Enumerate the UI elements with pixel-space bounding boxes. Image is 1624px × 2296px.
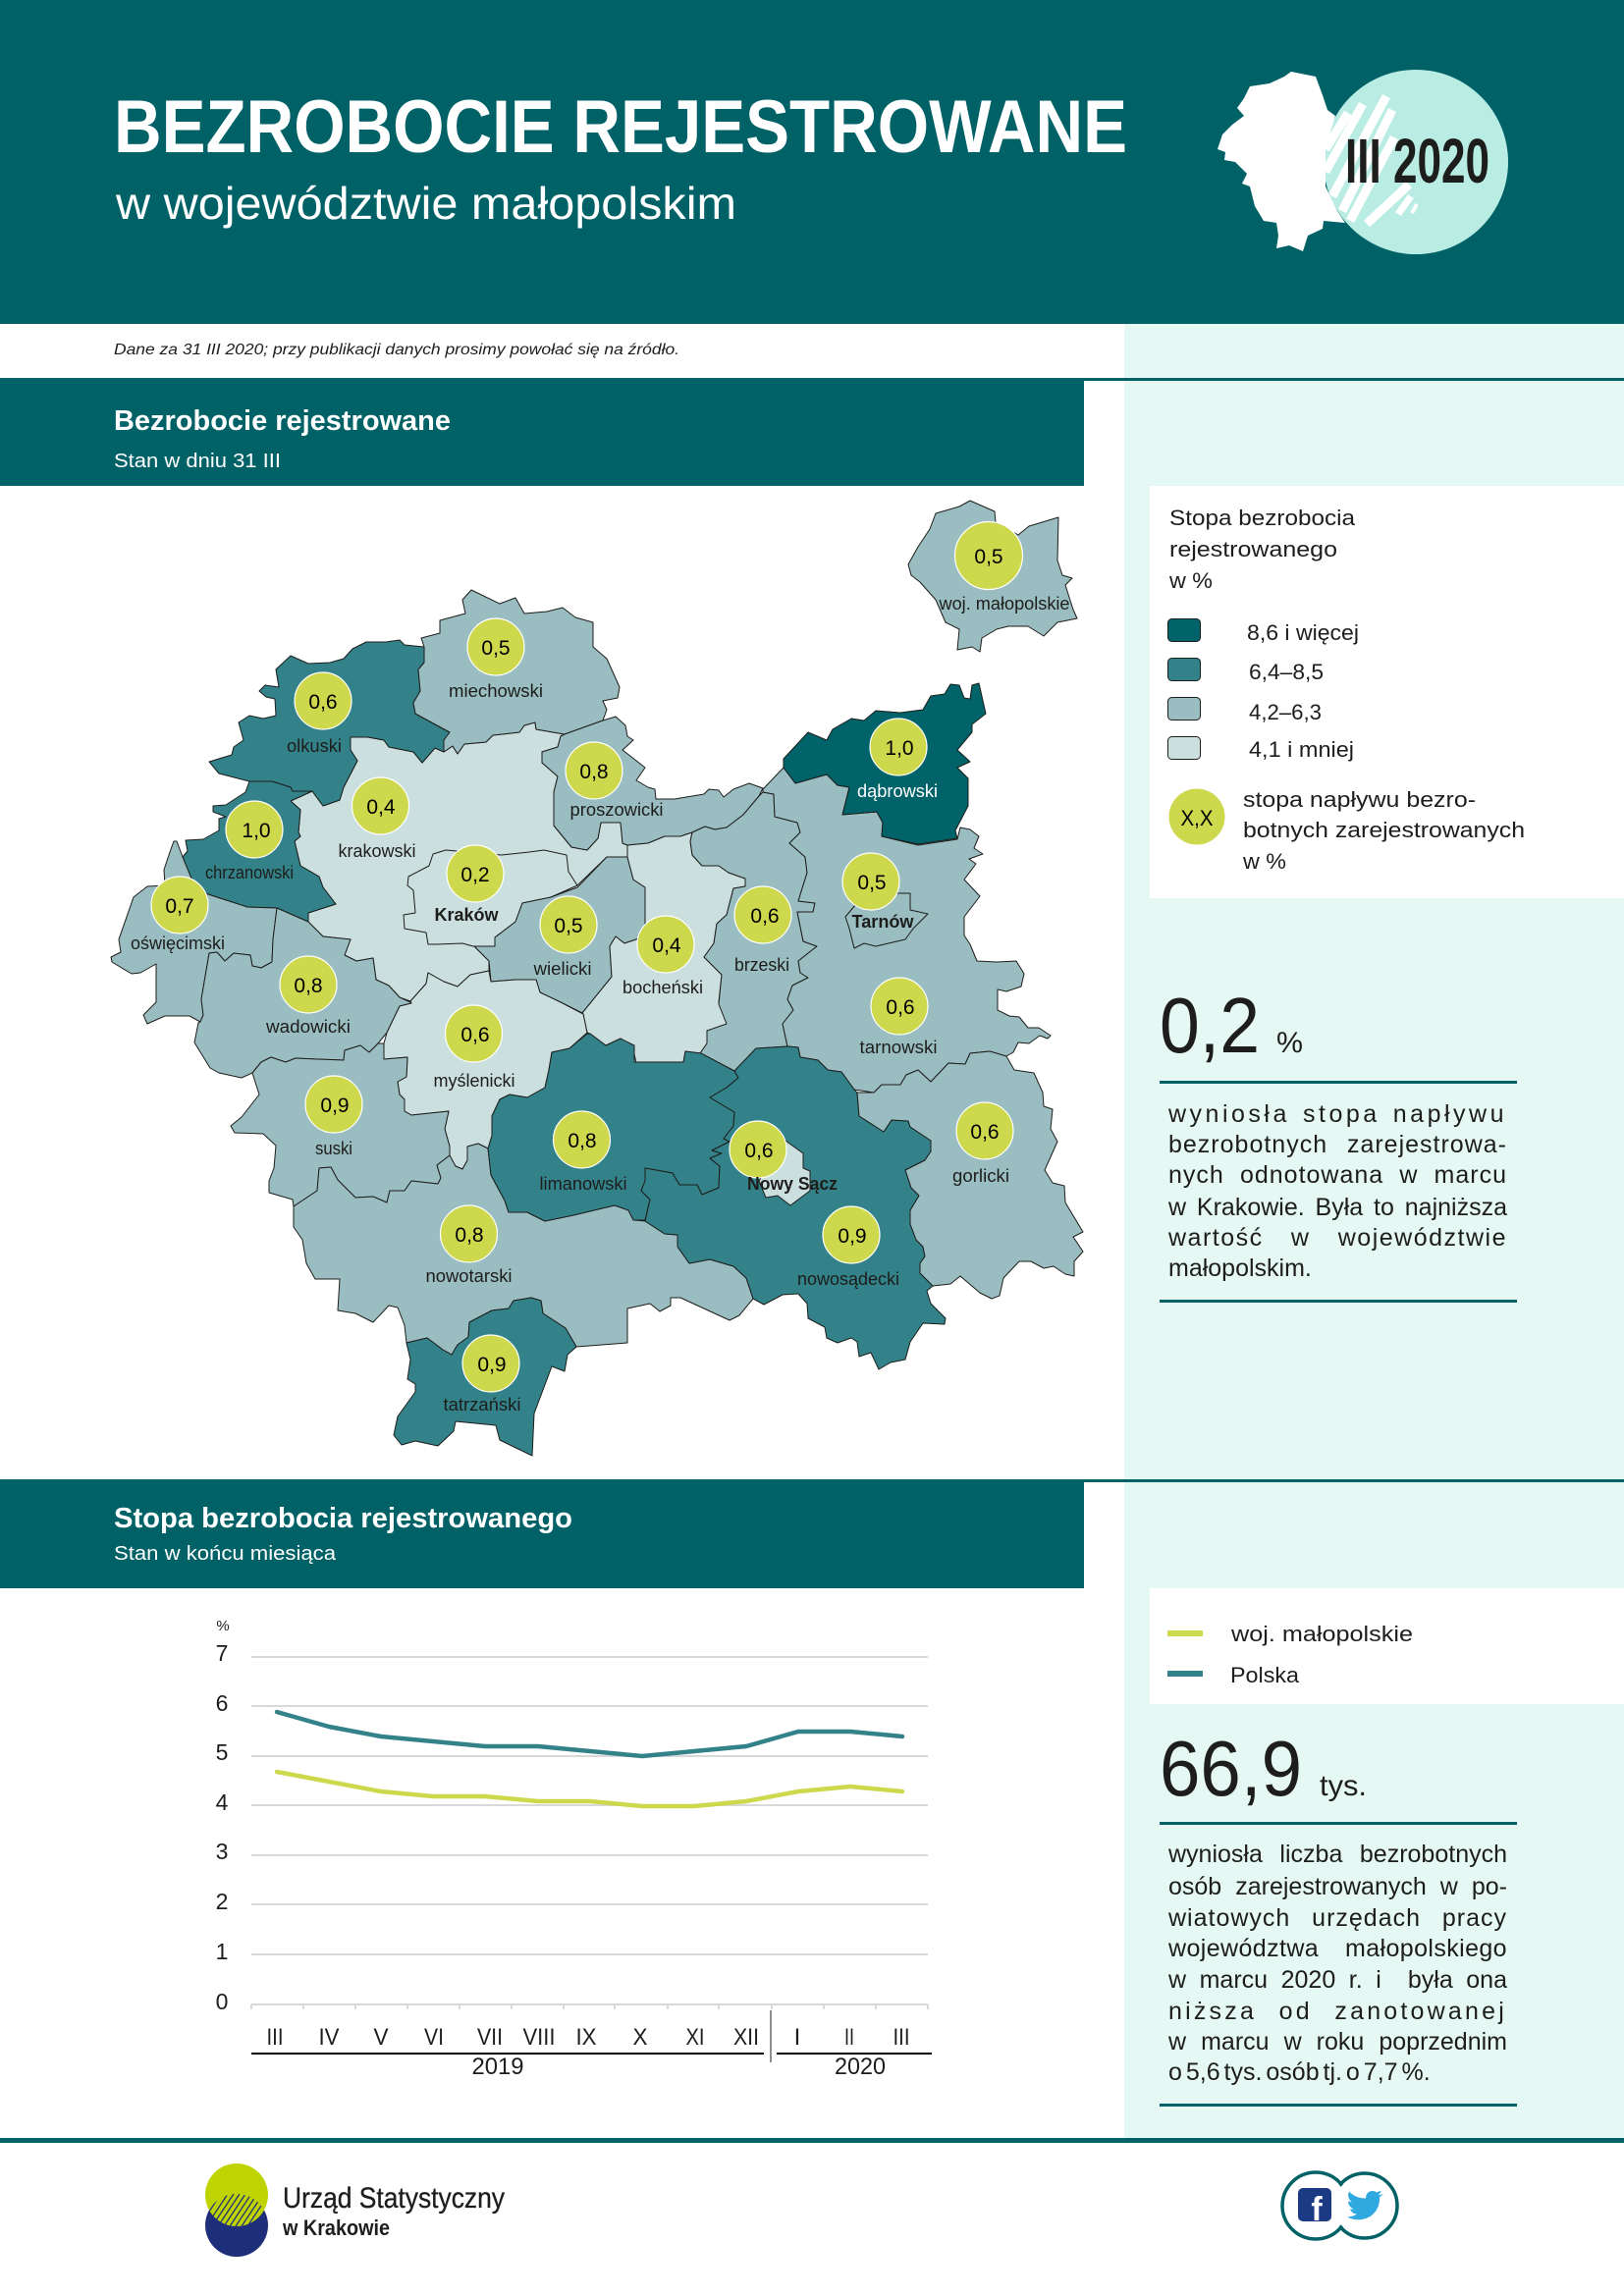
bubble: brzeski: brzeski	[734, 955, 789, 975]
region: brzeski	[690, 792, 817, 1071]
region: wielicki	[474, 857, 645, 1013]
region: tatrzański	[394, 1298, 576, 1456]
region: krakowski	[291, 722, 627, 1001]
y axis labels: 6	[216, 1690, 228, 1716]
source note: Dane za 31 III 2020; przy publikacji danych prosimy powołać się na źródło.	[114, 342, 679, 358]
bubble: oświęcimski: oświęcimski	[131, 934, 225, 953]
bubble: suski	[305, 1076, 362, 1158]
y axis labels: 2	[216, 1889, 228, 1914]
logo: Urząd Statystyczny w Krakowie	[201, 2163, 505, 2257]
bubble: Nowy Sącz: 0,6	[744, 1140, 774, 1162]
x axis labels: VIII	[522, 2024, 556, 2051]
bubble: Kraków: Kraków	[434, 905, 499, 925]
map legend panel: w %	[1168, 568, 1213, 593]
callout text	[1168, 1827, 1512, 2097]
callout text: o 5,6 tys. osób tj. o 7,7 %.	[1168, 2058, 1431, 2086]
region: bocheński	[582, 832, 745, 1063]
bubble: krakowski	[338, 777, 416, 861]
x axis labels: VI	[424, 2024, 444, 2051]
bubble: proszowicki: 0,8	[579, 761, 609, 783]
region: wadowicki	[194, 908, 411, 1078]
region: Kraków	[404, 850, 577, 946]
region: chrzanowski	[183, 781, 336, 922]
callout text: w Krakowie. Była to najniższa	[1168, 1194, 1507, 1221]
map legend panel	[1150, 486, 1624, 898]
bubble: tarnowski	[860, 978, 937, 1057]
legend item: inflow rate bubble	[1168, 787, 1525, 874]
x axis labels: 2019	[471, 2054, 524, 2080]
bubble: olkuski: olkuski	[287, 736, 342, 756]
callout text: osób zarejestrowanych w po-	[1168, 1873, 1507, 1900]
y axis labels: 4	[216, 1789, 229, 1815]
icon: twitter	[1347, 2191, 1383, 2219]
callout text: wartość w województwie	[1168, 1224, 1507, 1252]
map legend panel: rejestrowanego	[1169, 537, 1337, 561]
bubble: woj. małopolskie: woj. małopolskie	[938, 594, 1070, 614]
x axis labels: V	[373, 2024, 389, 2051]
region: limanowski	[488, 1034, 738, 1221]
callout: 0,2 %: %	[1276, 1027, 1303, 1059]
bubble: woj. małopolskie: 0,5	[974, 546, 1003, 568]
bubble: chrzanowski: 1,0	[242, 820, 271, 842]
bubble: nowotarski: nowotarski	[426, 1266, 513, 1286]
map legend panel: Stopa bezrobocia	[1169, 506, 1356, 530]
x axis labels: XI	[685, 2024, 705, 2051]
region: nowosądecki	[641, 1046, 946, 1369]
bubble: bocheński	[623, 916, 703, 997]
footer rule	[0, 2138, 1624, 2143]
bubble: brzeski	[734, 886, 791, 975]
section header: Stopa bezrobocia rejestrowanego: Stopa bezrobocia rejestrowanego	[114, 1503, 572, 1534]
section header: Bezrobocie rejestrowane	[0, 378, 1624, 486]
bubble: bocheński: 0,4	[652, 934, 681, 957]
callout: 66,9 tys.	[1160, 1725, 1517, 2107]
bubble: wielicki: wielicki	[532, 959, 591, 979]
legend item: 4,2–6,3: 4,2–6,3	[1249, 700, 1322, 724]
legend item: inflow rate bubble: botnych zarejestrowanych	[1243, 818, 1525, 842]
callout text: w marcu 2020 r. i była ona	[1168, 1966, 1507, 1994]
y axis labels: %	[216, 1618, 230, 1634]
bubble: suski: 0,9	[320, 1095, 350, 1117]
region: suski	[231, 1043, 450, 1206]
bubble: Nowy Sącz	[730, 1121, 838, 1194]
social icons	[1282, 2172, 1397, 2239]
bubble: proszowicki: proszowicki	[569, 800, 664, 820]
bubble: wadowicki: wadowicki	[265, 1017, 351, 1037]
bubble: myślenicki	[434, 1005, 514, 1091]
bubble: brzeski: 0,6	[750, 905, 780, 928]
y axis labels: 1	[216, 1939, 228, 1964]
emblem: region silhouette with date	[1218, 70, 1508, 254]
section header: Stopa bezrobocia rejestrowanego	[0, 1479, 1624, 1588]
bubble: Tarnów: 0,5	[857, 872, 887, 894]
map of powiats	[111, 501, 1083, 1456]
region: dąbrowski	[784, 683, 986, 844]
bubble: tatrzański	[444, 1335, 520, 1415]
legend item: inflow rate bubble: w %	[1242, 849, 1286, 874]
y axis labels: 3	[216, 1839, 228, 1864]
callout text: województwa małopolskiego	[1168, 1935, 1507, 1962]
region: gorlicki	[857, 1051, 1083, 1299]
title: BEZROBOCIE REJESTROWANE	[114, 85, 1127, 169]
bubble: Tarnów	[842, 853, 914, 932]
callout: 66,9 tys.: tys.	[1320, 1770, 1367, 1802]
bubble: dąbrowski: 1,0	[885, 737, 914, 760]
logo: Urząd Statystyczny w Krakowie: w Krakowie	[282, 2216, 390, 2240]
callout text: nych odnotowana w marcu	[1168, 1161, 1507, 1189]
emblem: region silhouette with date: III 2020	[1345, 126, 1489, 196]
bubble: krakowski: 0,4	[366, 796, 396, 819]
bubble: olkuski	[287, 672, 352, 756]
bubble: myślenicki: 0,6	[460, 1024, 490, 1046]
icon: facebook: f	[1311, 2191, 1323, 2228]
series: Polska	[277, 1712, 902, 1756]
bubble: nowotarski	[426, 1205, 513, 1286]
region: Tarnów	[845, 893, 928, 948]
bubble: limanowski: 0,8	[568, 1130, 597, 1152]
x axis labels: III	[267, 2024, 283, 2051]
callout text: małopolskim.	[1168, 1255, 1312, 1282]
legend item: inflow rate bubble: stopa napływu bezro-	[1243, 787, 1476, 812]
bubble: limanowski	[540, 1111, 626, 1194]
x axis labels	[251, 2010, 932, 2080]
bubble: dąbrowski	[857, 719, 938, 801]
y axis labels: 0	[216, 1989, 228, 2014]
bubble: tatrzański: tatrzański	[444, 1395, 520, 1415]
region: olkuski	[209, 640, 450, 806]
callout text	[1168, 1091, 1512, 1292]
inset: woj. małopolskie	[908, 501, 1077, 652]
callout: 66,9 tys.: 66,9	[1160, 1725, 1302, 1812]
bubble: gorlicki	[952, 1102, 1013, 1186]
x axis labels: X	[632, 2024, 648, 2051]
x axis labels: I	[794, 2024, 800, 2051]
bubble: myślenicki: myślenicki	[434, 1071, 514, 1091]
bubble: nowosądecki: 0,9	[838, 1225, 867, 1248]
bubble: bocheński: bocheński	[623, 978, 703, 997]
legend item: 4,2–6,3	[1168, 697, 1322, 724]
region: oświęcimski	[111, 841, 277, 1024]
bubble: wadowicki	[265, 956, 351, 1037]
x axis labels: XII	[733, 2024, 759, 2051]
bubble: gorlicki: 0,6	[970, 1121, 1000, 1144]
callout: 0,2 %	[1160, 982, 1517, 1303]
bubble: miechowski: miechowski	[449, 681, 543, 701]
bubble: olkuski: 0,6	[308, 691, 338, 714]
chart legend panel: woj. małopolskie	[1230, 1622, 1413, 1646]
bubble: oświęcimski: 0,7	[165, 895, 194, 918]
y axis labels: 7	[216, 1640, 228, 1666]
bubble: tarnowski: tarnowski	[860, 1038, 937, 1057]
section header: Bezrobocie rejestrowane: Bezrobocie rejestrowane	[114, 405, 451, 437]
bubble: dąbrowski: dąbrowski	[857, 781, 938, 801]
logo: Urząd Statystyczny w Krakowie: Urząd Statystyczny	[283, 2182, 505, 2215]
region: myślenicki	[384, 971, 587, 1169]
callout text: wyniosła liczba bezrobotnych	[1168, 1841, 1507, 1868]
legend item: 6,4–8,5	[1168, 658, 1324, 684]
bubble: Tarnów: Tarnów	[852, 912, 914, 932]
legend item: 6,4–8,5: 6,4–8,5	[1249, 660, 1324, 684]
region: Nowy Sącz	[759, 1141, 810, 1205]
y axis labels	[216, 1618, 230, 2014]
bubble: tatrzański: 0,9	[477, 1354, 507, 1376]
bubble: nowosądecki	[797, 1206, 899, 1289]
bubble: chrzanowski	[205, 801, 294, 882]
x axis labels: II	[844, 2024, 854, 2051]
legend item: 8,6 i więcej: 8,6 i więcej	[1247, 620, 1359, 645]
bubble: chrzanowski: chrzanowski	[205, 863, 294, 882]
callout text: niższa od zanotowanej	[1168, 1998, 1507, 2025]
bubble: suski: suski	[315, 1139, 352, 1158]
callout text: w marcu w roku poprzednim	[1168, 2028, 1507, 2056]
bubble: woj. małopolskie	[938, 522, 1070, 614]
chart legend panel	[1150, 1588, 1624, 1704]
callout text: wiatowych urzędach pracy	[1168, 1904, 1507, 1932]
bubble: limanowski: limanowski	[540, 1174, 626, 1194]
bubble: wielicki	[532, 896, 597, 979]
region: miechowski	[413, 590, 620, 754]
series: woj. małopolskie	[277, 1772, 902, 1806]
bubble: nowotarski: 0,8	[455, 1224, 484, 1247]
x axis labels: IX	[575, 2024, 597, 2051]
legend item: 8,6 i więcej	[1168, 618, 1359, 645]
bubble: Nowy Sącz: Nowy Sącz	[747, 1174, 838, 1194]
callout text: bezrobotnych zarejestrowa-	[1168, 1131, 1507, 1158]
x axis labels: 2020	[835, 2054, 886, 2080]
header banner	[0, 0, 1624, 324]
bubble: wadowicki: 0,8	[294, 975, 323, 997]
bubble: miechowski: 0,5	[481, 637, 511, 660]
section header: Stopa bezrobocia rejestrowanego: Stan w końcu miesiąca	[114, 1543, 337, 1565]
x axis labels: VII	[477, 2024, 503, 2051]
bubble: Kraków: 0,2	[460, 864, 490, 886]
bubble: Kraków	[434, 845, 504, 925]
region: tarnowski	[763, 768, 1051, 1093]
bubble: oświęcimski	[131, 877, 225, 953]
chart legend panel: Polska	[1230, 1663, 1300, 1687]
line chart	[216, 1618, 932, 2080]
x axis labels: III	[893, 2024, 909, 2051]
section header: Bezrobocie rejestrowane: Stan w dniu 31 III	[114, 451, 281, 472]
x axis labels: IV	[318, 2024, 340, 2051]
bubble: tarnowski: 0,6	[886, 996, 915, 1019]
callout text: wyniosła stopa napływu	[1168, 1100, 1507, 1128]
region: nowotarski	[294, 1144, 753, 1355]
bubble: gorlicki: gorlicki	[952, 1166, 1009, 1186]
region: proszowicki	[542, 717, 763, 850]
legend item: inflow rate bubble: X,X	[1180, 806, 1214, 830]
bubble: proszowicki	[566, 742, 664, 820]
bubble: nowosądecki: nowosądecki	[797, 1269, 899, 1289]
bubble: miechowski	[449, 618, 543, 701]
bubble: krakowski: krakowski	[338, 841, 416, 861]
bubble: wielicki: 0,5	[554, 915, 583, 937]
callout: 0,2 %: 0,2	[1160, 982, 1260, 1069]
legend item: 4,1 i mniej	[1168, 736, 1354, 762]
subtitle: w województwie małopolskim	[115, 178, 736, 229]
legend item: 4,1 i mniej: 4,1 i mniej	[1249, 737, 1354, 762]
y axis labels: 5	[216, 1739, 228, 1765]
